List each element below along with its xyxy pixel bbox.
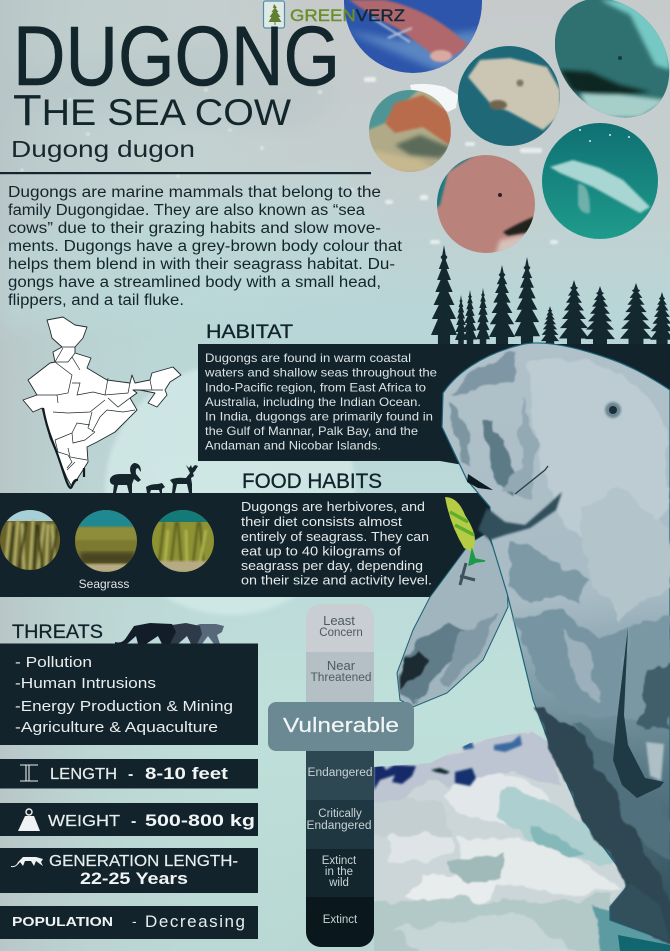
habitat text: Andaman and Nicobar Islands. — [205, 438, 381, 452]
status: extinct — [306, 897, 374, 947]
dugong right flipper crescent — [613, 627, 664, 798]
stat: weight: - — [131, 813, 136, 830]
status: critically endangered: Critically — [318, 808, 362, 820]
map of India — [23, 317, 181, 488]
status: critically endangered — [306, 800, 374, 849]
habitat text: the Gulf of Mannar, Palk Bay, and the — [205, 424, 418, 438]
intro paragraph: cows” due to their grazing habits and slow move- — [8, 220, 381, 237]
threats heading: THREATS — [12, 622, 103, 643]
status: least concern: Least — [323, 613, 355, 628]
stat: population — [0, 906, 258, 939]
food habits text — [241, 499, 432, 588]
status: vulnerable highlighted — [268, 702, 414, 751]
dugong illustration — [397, 343, 670, 945]
sea foam — [370, 725, 670, 951]
food habits text: their diet consists almost — [241, 514, 402, 529]
stat: weight: WEIGHT — [48, 813, 120, 830]
panel: threats: -Human Intrusions — [15, 675, 156, 692]
habitat text: waters and shallow seas throughout the — [204, 366, 437, 380]
status: near threatened: Near — [327, 658, 356, 673]
stat: length: LENGTH — [50, 766, 117, 783]
dugong flipper — [397, 533, 508, 707]
dugong mouth line — [515, 466, 548, 494]
stat: length — [0, 759, 258, 788]
panel: threats: - Pollution — [15, 654, 92, 671]
status: near threatened — [306, 652, 374, 702]
dugong shading — [447, 350, 670, 945]
scientific name: Dugong dugon — [11, 136, 195, 162]
photo circle: green dugong — [555, 0, 670, 120]
food habits text: eat up to 40 kilograms of — [241, 544, 401, 558]
stat: generation length — [0, 848, 258, 893]
intro paragraph: helps them blend in with their seagrass habitat. Du- — [8, 256, 395, 273]
habitat text — [204, 351, 437, 452]
panther silhouettes — [115, 623, 224, 645]
logo: Greenverz — [264, 1, 284, 28]
habitat text: In India, dugongs are primarily found in — [205, 410, 433, 424]
food habits text: Dugongs are herbivores, and — [241, 499, 425, 514]
intro paragraph — [8, 184, 403, 309]
food habits text: entirely of seagrass. They can — [241, 529, 429, 544]
stat: population: - — [132, 913, 137, 929]
stat: length: 8-10 feet — [145, 764, 228, 783]
status: extinct in the wild: wild — [328, 877, 349, 889]
status: near threatened: Threatened — [310, 672, 372, 684]
status: endangered: Endangered — [308, 767, 372, 779]
dugong body — [442, 343, 670, 942]
status: critically endangered: Endangered — [306, 820, 372, 832]
photo circle: teal underwater dugong — [540, 121, 660, 241]
intro paragraph: ments. Dugongs have a grey-brown body colour that — [8, 238, 403, 255]
food habits heading: FOOD HABITS — [242, 470, 382, 493]
status: extinct in the wild: Extinct — [322, 855, 357, 867]
intro paragraph: flippers, and a tail fluke. — [8, 292, 184, 309]
status: least concern: Concern — [319, 627, 363, 639]
seagrass photo 1 — [0, 510, 60, 570]
stat: population: POPULATION — [12, 914, 113, 929]
panel: food habits background — [0, 493, 495, 597]
stat: generation length: 22-25 Years — [80, 869, 188, 888]
status: endangered — [306, 751, 374, 800]
photo circle: blue water dugong — [344, 0, 482, 73]
dugong light flipper patch — [646, 742, 664, 781]
animals silhouette — [110, 463, 198, 493]
conservation status scale — [268, 604, 414, 947]
intro paragraph: gongs have a streamlined body with a small head, — [8, 274, 381, 291]
status: vulnerable highlighted: Vulnerable — [283, 714, 399, 737]
logo wordmark: GREEN VERZ — [290, 6, 405, 25]
panel: habitat background — [198, 344, 670, 470]
dugong mouth dark — [467, 474, 493, 490]
intro paragraph: Dugongs are marine mammals that belong to the — [8, 184, 381, 201]
habitat text: Australia, including the Indian Ocean. — [205, 395, 421, 409]
panel: threats: -Agriculture & Aquaculture — [15, 719, 218, 736]
title: DUGONG — [13, 9, 340, 103]
seagrass label: Seagrass — [79, 577, 129, 591]
status: extinct: Extinct — [323, 914, 358, 926]
intro paragraph: family Dugongidae. They are also known as “sea — [8, 202, 365, 219]
dugong eye — [605, 402, 621, 418]
panel: threats: -Energy Production & Mining — [15, 698, 233, 715]
status: extinct in the wild: in the — [325, 866, 353, 878]
photo circle: pale dugong — [458, 46, 560, 146]
status: least concern — [306, 604, 374, 652]
green fish — [445, 497, 485, 585]
seagrass photo 3 — [152, 510, 214, 572]
photo circle: pink dugong close-up — [434, 153, 538, 255]
seagrass photo 2 — [75, 510, 137, 572]
stat: generation length: GENERATION LENGTH- — [49, 853, 238, 870]
stat: length: - — [128, 766, 133, 783]
tree line — [431, 245, 670, 345]
food habits text: seagrass per day, depending — [241, 558, 423, 573]
photo circle: orange dugong — [368, 88, 453, 174]
dugong fin — [610, 883, 670, 942]
subtitle: THE SEA COW — [13, 86, 291, 135]
stat: weight: 500-800 kg — [145, 811, 255, 830]
habitat heading: HABITAT — [206, 321, 293, 343]
habitat text: Indo-Pacific region, from East Africa to — [205, 380, 426, 394]
habitat text: Dugongs are found in warm coastal — [205, 351, 411, 365]
status: extinct in the wild — [306, 849, 374, 897]
food habits text: on their size and activity level. — [241, 572, 432, 588]
stat: weight — [0, 803, 258, 836]
dugong throat shadow — [478, 492, 562, 540]
stat: population: Decreasing — [145, 912, 245, 931]
panel: threats — [0, 644, 258, 745]
